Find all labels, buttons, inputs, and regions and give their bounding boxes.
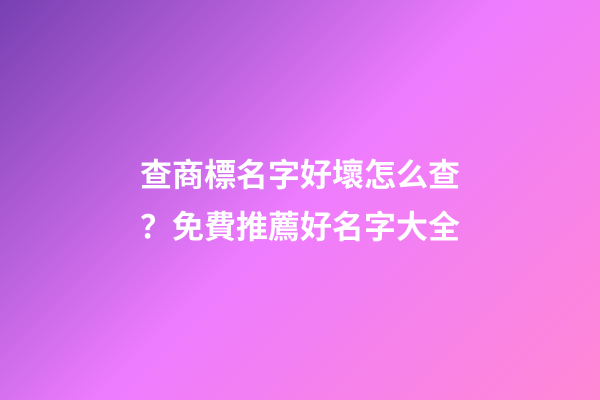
title bbox=[140, 157, 460, 245]
title: 查商標名字好壞怎么查 bbox=[140, 157, 460, 193]
title: ？免費推薦好名字大全 bbox=[140, 209, 460, 245]
